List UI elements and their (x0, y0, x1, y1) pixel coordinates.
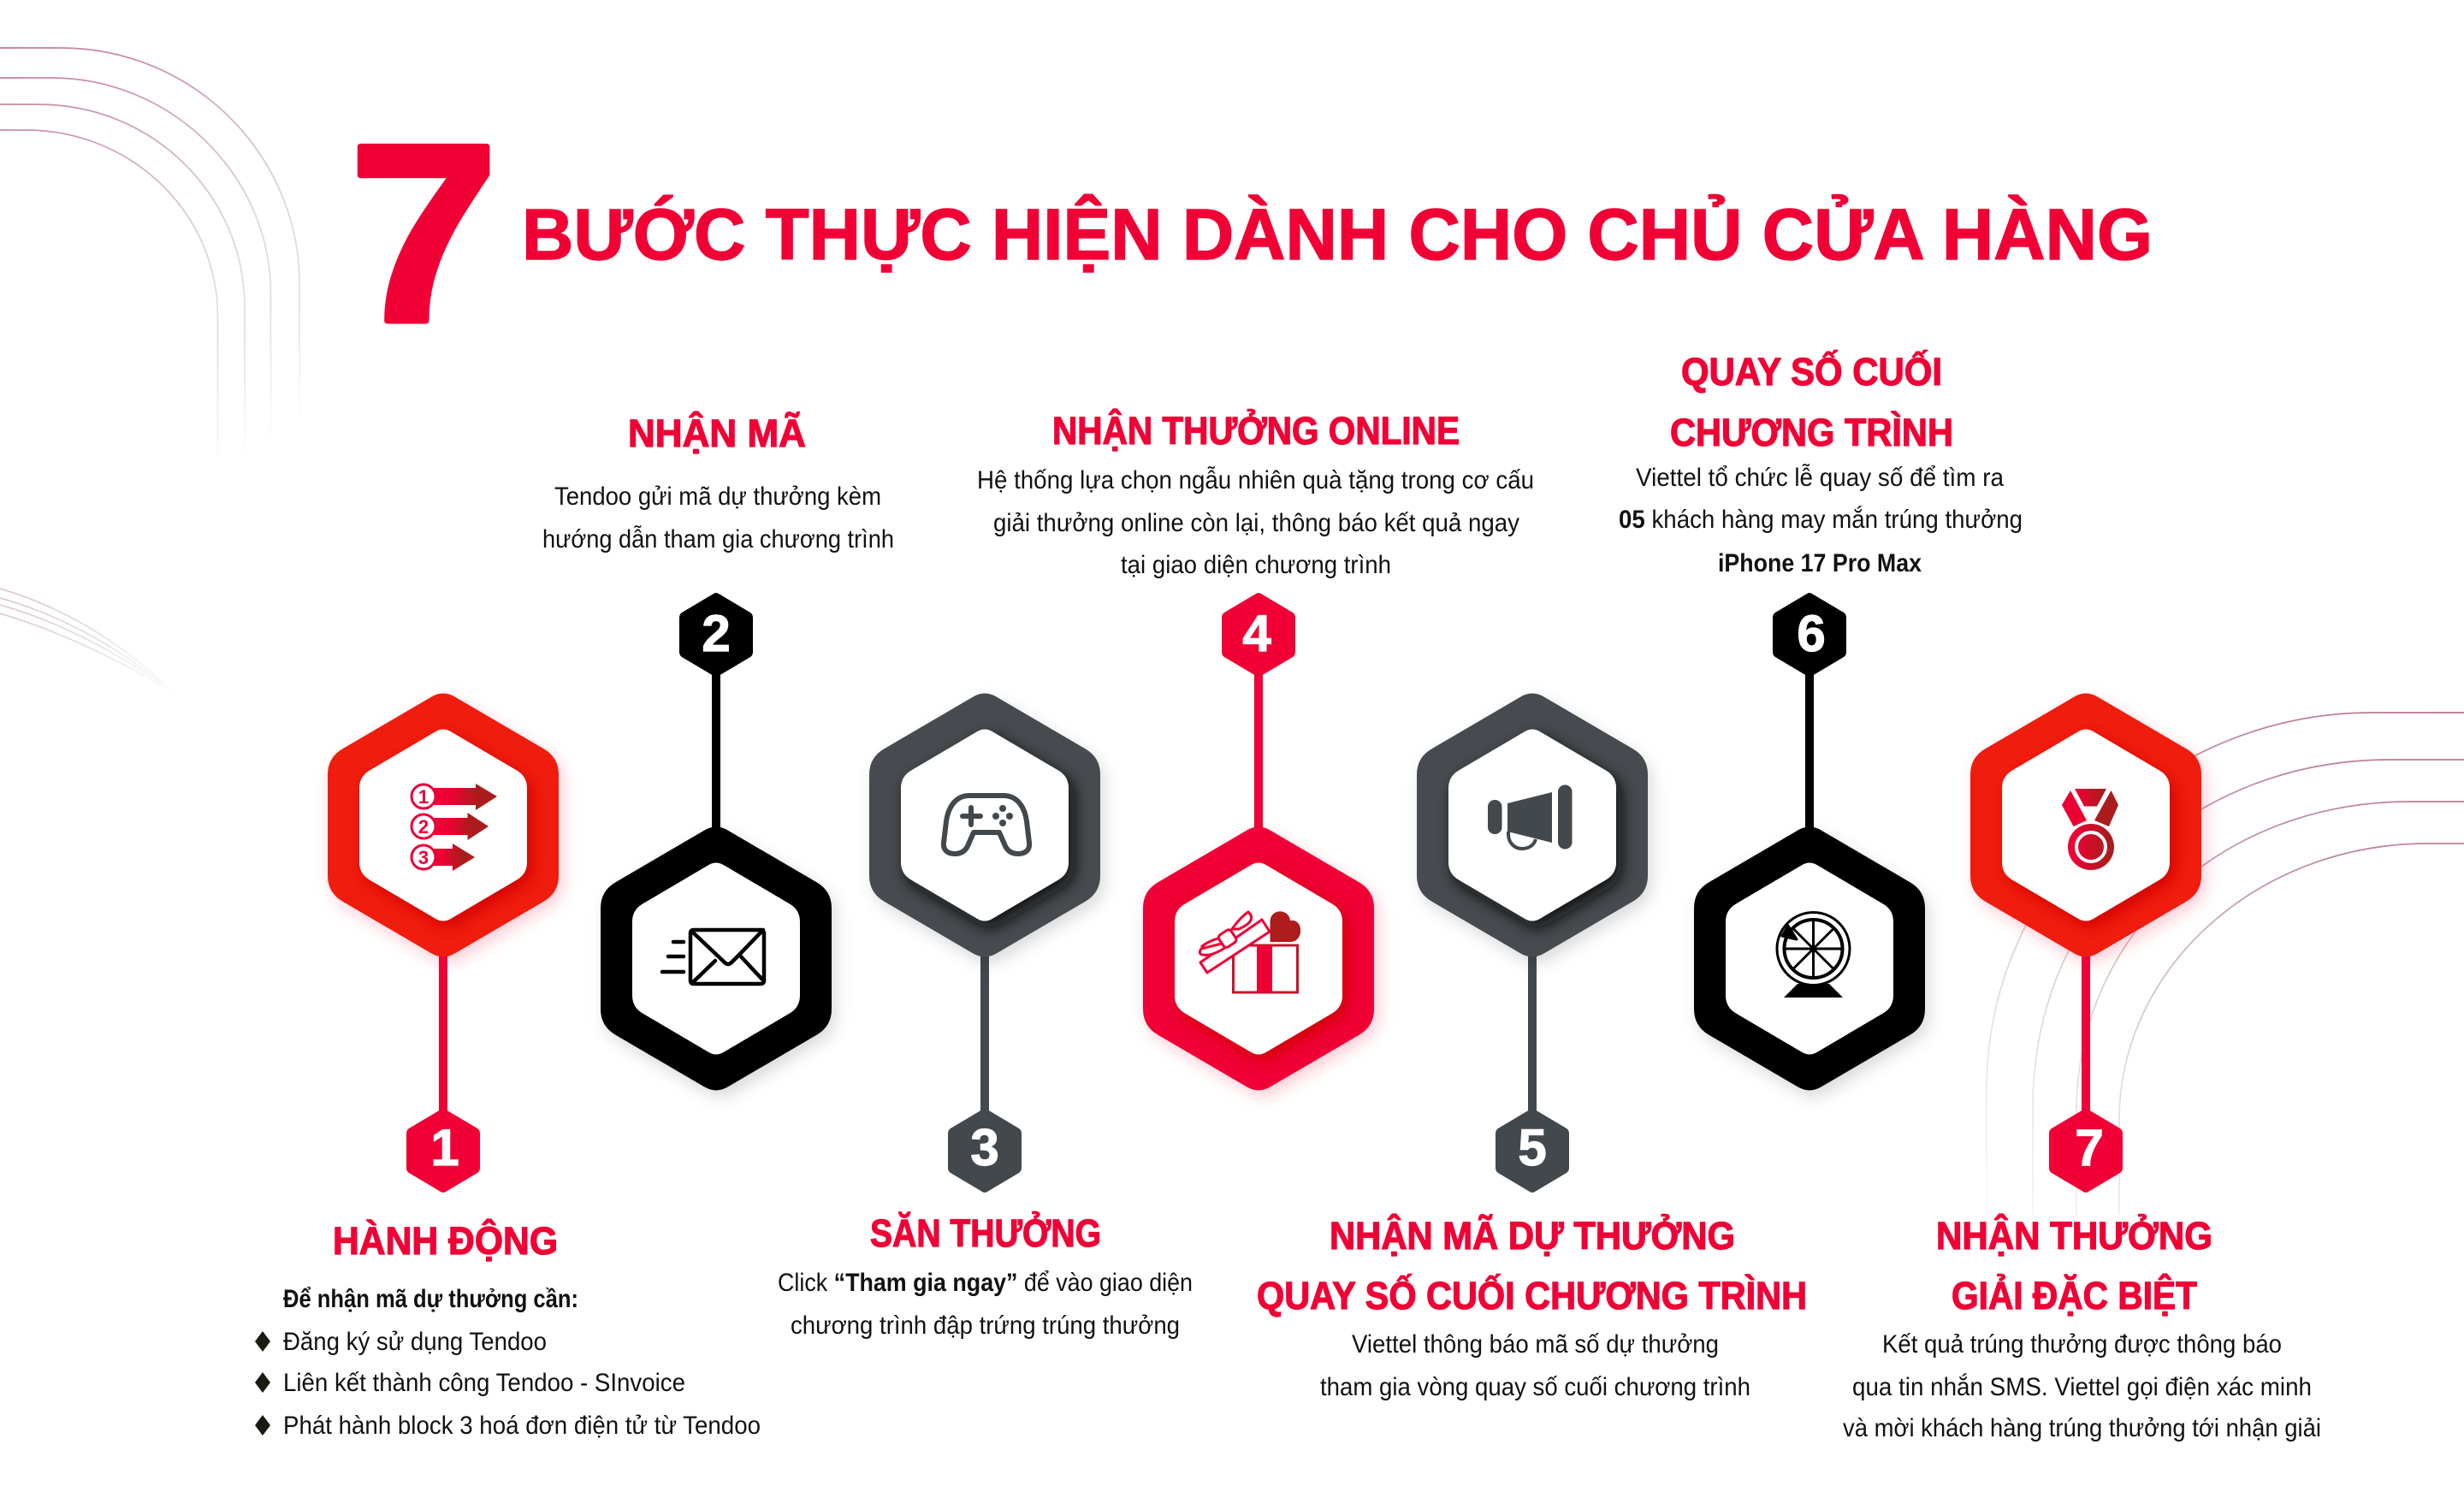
step 6 (1619, 350, 2023, 1090)
hexagon 3 (869, 694, 1100, 956)
text block 6: iPhone 17 Pro Max (1718, 549, 1922, 577)
icon: numbered arrows: 2 (418, 816, 429, 838)
text block 3: chương trình đập trứng trúng thưởng (791, 1311, 1180, 1340)
background line arcs top left (0, 48, 299, 453)
hexagon 6 (1694, 827, 1925, 1090)
connector 3 (980, 950, 989, 1116)
heading 5: QUAY SỐ CUỐI CHƯƠNG TRÌNH (1257, 1274, 1807, 1317)
hexagon 7 (1970, 694, 2201, 956)
text block 6: 05 khách hàng may mắn trúng thưởng (1619, 506, 2023, 534)
text block 5: tham gia vòng quay số cuối chương trình (1320, 1373, 1750, 1401)
text block 4: Hệ thống lựa chọn ngẫu nhiên quà tặng trong cơ cấu (977, 466, 1534, 494)
hexagon 5 (1417, 694, 1648, 956)
text block 4 (977, 466, 1534, 579)
text block 7: qua tin nhắn SMS. Viettel gọi điện xác minh (1852, 1373, 2312, 1401)
icon: game controller (944, 796, 1029, 854)
heading 5: NHẬN MÃ DỰ THƯỞNG (1330, 1214, 1735, 1258)
heading 1: HÀNH ĐỘNG (333, 1219, 558, 1263)
number badge 1: 1 (430, 1119, 459, 1176)
icon: prize wheel (1777, 912, 1850, 998)
text block 6 (1619, 464, 2023, 577)
connector 7 (2082, 950, 2090, 1116)
background line arcs bottom right (1987, 713, 2464, 1215)
number badge 6: 6 (1797, 605, 1826, 662)
text block 7: và mời khách hàng trúng thưởng tới nhận giải (1843, 1414, 2321, 1442)
icon: numbered arrows (412, 784, 497, 871)
heading 7 (1936, 1214, 2212, 1317)
number badge 5 (1496, 1109, 1569, 1193)
heading 7: NHẬN THƯỞNG (1936, 1214, 2212, 1258)
text block 2: hướng dẫn tham gia chương trình (542, 525, 894, 554)
text block 1 (255, 1285, 761, 1440)
connector 2 (712, 650, 720, 834)
number badge 3: 3 (970, 1119, 999, 1176)
hexagon 4 (1143, 827, 1374, 1090)
connector 1 (439, 950, 447, 1116)
big number 7: 7 (349, 92, 499, 375)
step 7 (1843, 694, 2321, 1442)
text block 1: Đăng ký sử dụng Tendoo (283, 1328, 547, 1356)
heading 6: QUAY SỐ CUỐI (1681, 350, 1942, 394)
number badge 1 (406, 1109, 480, 1193)
text block 1: Để nhận mã dự thưởng cần: (283, 1285, 578, 1313)
number badge 5: 5 (1518, 1119, 1547, 1176)
step 2 (542, 411, 894, 1090)
text block 7: Kết quả trúng thưởng được thông báo (1882, 1330, 2282, 1359)
number badge 2 (679, 593, 753, 677)
icon: medal (2062, 789, 2118, 870)
heading 4: NHẬN THƯỞNG ONLINE (1052, 409, 1460, 453)
text block 4: tại giao diện chương trình (1121, 551, 1391, 579)
number badge 7 (2049, 1109, 2123, 1193)
text block 4: giải thưởng online còn lại, thông báo kết quả ngay (993, 509, 1519, 537)
icon: envelope (662, 930, 764, 984)
step 1 (255, 694, 761, 1440)
icon: gift box (1199, 911, 1300, 992)
step 4 (977, 409, 1534, 1090)
number badge 4 (1222, 593, 1295, 677)
heading 7: GIẢI ĐẶC BIỆT (1952, 1274, 2197, 1317)
number badge 6 (1773, 593, 1846, 677)
heading 6: CHƯƠNG TRÌNH (1670, 411, 1953, 454)
heading 2: NHẬN MÃ (628, 411, 806, 455)
hexagon 2 (601, 827, 832, 1090)
text block 1: Phát hành block 3 hoá đơn điện tử từ Tendoo (283, 1412, 761, 1440)
icon: numbered arrows: 3 (418, 847, 429, 868)
title text: BƯỚC THỰC HIỆN DÀNH CHO CHỦ CỬA HÀNG (522, 194, 2153, 275)
icon: megaphone (1488, 785, 1573, 849)
background line arcs mid left (0, 589, 175, 694)
connector 6 (1805, 650, 1814, 834)
text block 3 (778, 1269, 1193, 1340)
number badge 4: 4 (1242, 605, 1271, 662)
heading 6 (1670, 350, 1953, 454)
step 3 (778, 694, 1193, 1340)
text block 2: Tendoo gửi mã dự thưởng kèm (554, 483, 881, 511)
text block 7 (1843, 1330, 2321, 1442)
number badge 3 (948, 1109, 1022, 1193)
heading 5 (1257, 1214, 1807, 1317)
text block 3: Click “Tham gia ngay” để vào giao diện (778, 1269, 1193, 1297)
heading 3: SĂN THƯỞNG (870, 1211, 1101, 1255)
text block 2 (542, 483, 894, 554)
connector 4 (1254, 650, 1263, 834)
number badge 2: 2 (702, 605, 731, 662)
connector 5 (1528, 950, 1537, 1116)
text block 5 (1320, 1330, 1750, 1401)
title (349, 92, 2153, 375)
number badge 7: 7 (2075, 1119, 2104, 1176)
step 5 (1257, 694, 1807, 1401)
hexagon 1 (328, 694, 559, 956)
text block 5: Viettel thông báo mã số dự thưởng (1352, 1330, 1719, 1359)
icon: numbered arrows: 1 (418, 786, 429, 808)
text block 1: Liên kết thành công Tendoo - SInvoice (283, 1369, 685, 1397)
text block 6: Viettel tổ chức lễ quay số để tìm ra (1636, 464, 2004, 492)
